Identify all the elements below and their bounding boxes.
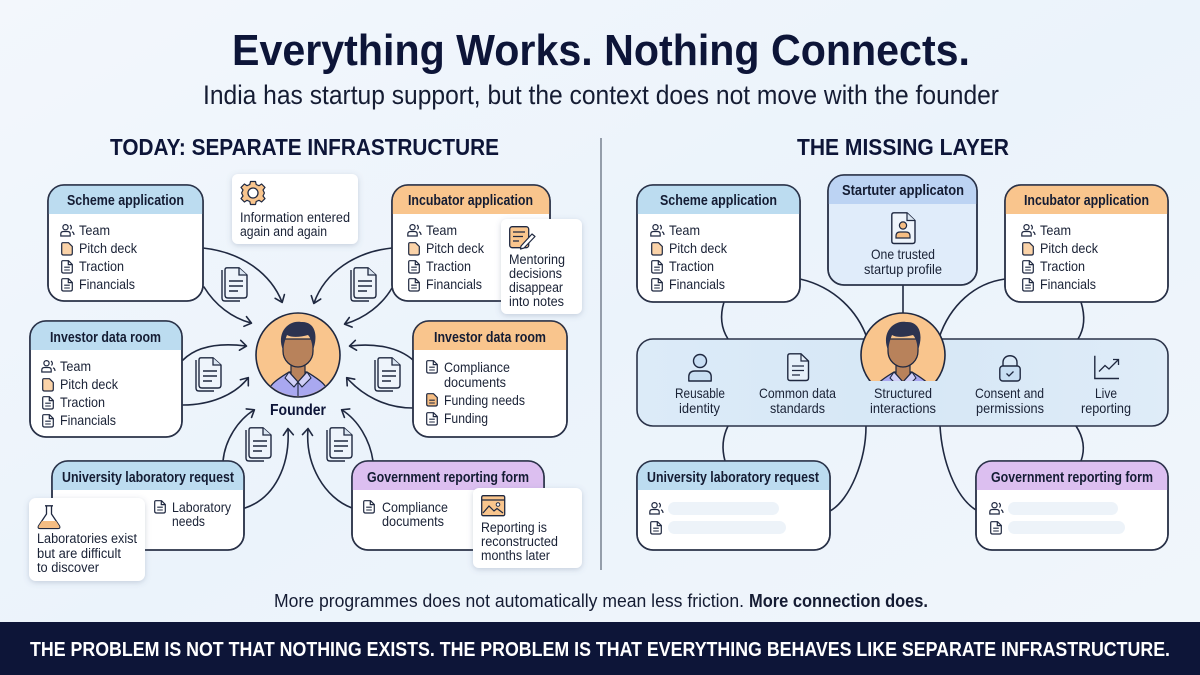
icon: flask <box>38 506 60 528</box>
card: investor data room left: Financials <box>60 412 116 428</box>
card: government reporting form left: documents <box>382 513 444 529</box>
card: investor data room right <box>413 321 567 437</box>
card: university laboratory request right <box>637 461 830 550</box>
card: university laboratory request right: University laboratory request <box>647 470 819 486</box>
card: startuter application: startup profile <box>864 261 942 277</box>
card: incubator application left <box>392 185 550 301</box>
card: incubator application right: Incubator application <box>1024 193 1149 209</box>
icon: consent lock <box>1000 356 1020 381</box>
card: incubator application left: Incubator application <box>408 193 533 209</box>
card: university laboratory request left: University laboratory request <box>62 470 234 486</box>
heading: today: TODAY: SEPARATE INFRASTRUCTURE <box>110 134 499 160</box>
founder <box>256 313 340 419</box>
connectors <box>722 279 1084 511</box>
band: shared connection layer: reporting <box>1081 400 1131 416</box>
callout: mentoring decisions: Mentoring <box>509 252 565 267</box>
callout: information entered: Information entered <box>240 210 350 225</box>
card: incubator application right: Team <box>1040 222 1071 238</box>
card: scheme application right: Financials <box>669 276 725 292</box>
card: investor data room right: Funding needs <box>444 392 525 408</box>
callout: mentoring decisions: into notes <box>509 294 564 309</box>
callout: information entered: again and again <box>240 224 327 239</box>
card: incubator application right: Traction <box>1040 258 1085 274</box>
band: shared connection layer: Live <box>1095 385 1117 401</box>
icon: live reporting chart <box>1095 356 1119 378</box>
card: startuter application: One trusted <box>871 246 935 262</box>
band: shared connection layer: permissions <box>976 400 1044 416</box>
card: scheme application right: Scheme application <box>660 193 777 209</box>
panel: the missing layer <box>637 175 1168 550</box>
bottom banner <box>0 622 1200 675</box>
card: investor data room left: Pitch deck <box>60 376 119 392</box>
icon: image window <box>482 496 505 516</box>
card: government reporting form left: Government reporting form <box>367 470 529 486</box>
callout: information entered <box>232 174 358 244</box>
takeaway line: More programmes does not automatically mean less friction. <box>274 591 744 611</box>
subtitle: India has startup support, but the context does not move with the founder <box>203 80 999 110</box>
heading: missing layer: THE MISSING LAYER <box>797 134 1009 160</box>
band: shared connection layer: Reusable <box>675 385 725 401</box>
band: shared connection layer: standards <box>770 400 825 416</box>
callout: reporting: reconstructed <box>481 534 558 549</box>
card: university laboratory request left <box>52 461 244 550</box>
card: startuter application: Startuter applicaton <box>842 183 964 199</box>
band: shared connection layer: Consent and <box>975 385 1044 401</box>
card: incubator application right <box>1005 185 1168 302</box>
callout: laboratories: but are difficult <box>37 546 121 561</box>
card: incubator application left: Team <box>426 222 457 238</box>
card: scheme application: Scheme application <box>67 193 184 209</box>
card: government reporting form left <box>352 461 544 550</box>
card: university laboratory request left: Laboratory <box>172 499 231 515</box>
card: investor data room left: Traction <box>60 394 105 410</box>
card: government reporting form right <box>976 461 1168 550</box>
band: shared connection layer: interactions <box>870 400 936 416</box>
band: shared connection layer: identity <box>679 400 720 416</box>
card: scheme application right: Team <box>669 222 700 238</box>
card: startuter application <box>828 175 977 285</box>
card: incubator application left: Traction <box>426 258 471 274</box>
icon: notes and pen <box>510 227 535 249</box>
card: incubator application right: Pitch deck <box>1040 240 1099 256</box>
callout: laboratories <box>29 498 145 581</box>
callout: reporting: months later <box>481 548 550 563</box>
callout: reporting <box>473 488 582 568</box>
card: scheme application: Pitch deck <box>79 240 138 256</box>
card: scheme application: Financials <box>79 276 135 292</box>
document icons on arrows <box>196 268 400 461</box>
card: investor data room left <box>30 321 182 437</box>
icon: gear <box>241 182 265 204</box>
takeaway line: More connection does. <box>749 591 928 611</box>
card: investor data room left: Investor data room <box>50 330 161 346</box>
card: incubator application left: Financials <box>426 276 482 292</box>
card: investor data room right: Funding <box>444 410 488 426</box>
title: Everything Works. Nothing Connects. <box>232 26 970 75</box>
card: government reporting form left: Compliance <box>382 499 448 515</box>
card: scheme application: Team <box>79 222 110 238</box>
card: incubator application right: Financials <box>1040 276 1096 292</box>
card: scheme application right: Traction <box>669 258 714 274</box>
band: shared connection layer <box>637 339 1168 426</box>
card: investor data room right: Compliance <box>444 359 510 375</box>
founder: Founder <box>270 402 326 419</box>
callout: mentoring decisions <box>501 219 582 314</box>
card: government reporting form right: Government reporting form <box>991 470 1153 486</box>
icon: startup profile <box>892 213 915 244</box>
card: investor data room left: Team <box>60 358 91 374</box>
callout: laboratories: to discover <box>37 560 99 575</box>
founder in band <box>860 312 946 381</box>
band: shared connection layer: Common data <box>759 385 836 401</box>
panel: today separate infrastructure <box>29 174 582 581</box>
card: scheme application right: Pitch deck <box>669 240 728 256</box>
card: incubator application left: Pitch deck <box>426 240 485 256</box>
callout: mentoring decisions: decisions <box>509 266 562 281</box>
arrows into founder <box>183 248 413 508</box>
card: scheme application: Traction <box>79 258 124 274</box>
card: university laboratory request left: needs <box>172 513 205 529</box>
callout: reporting: Reporting is <box>481 520 547 535</box>
card: investor data room right: Investor data room <box>434 330 546 346</box>
callout: mentoring decisions: disappear <box>509 280 563 295</box>
card: scheme application right <box>637 185 800 302</box>
icon: common data standards <box>788 354 808 380</box>
band: shared connection layer: Structured <box>874 385 932 401</box>
icon: reusable identity <box>689 354 711 381</box>
card: scheme application <box>48 185 203 301</box>
card: investor data room right: documents <box>444 374 506 390</box>
callout: laboratories: Laboratories exist <box>37 531 137 546</box>
